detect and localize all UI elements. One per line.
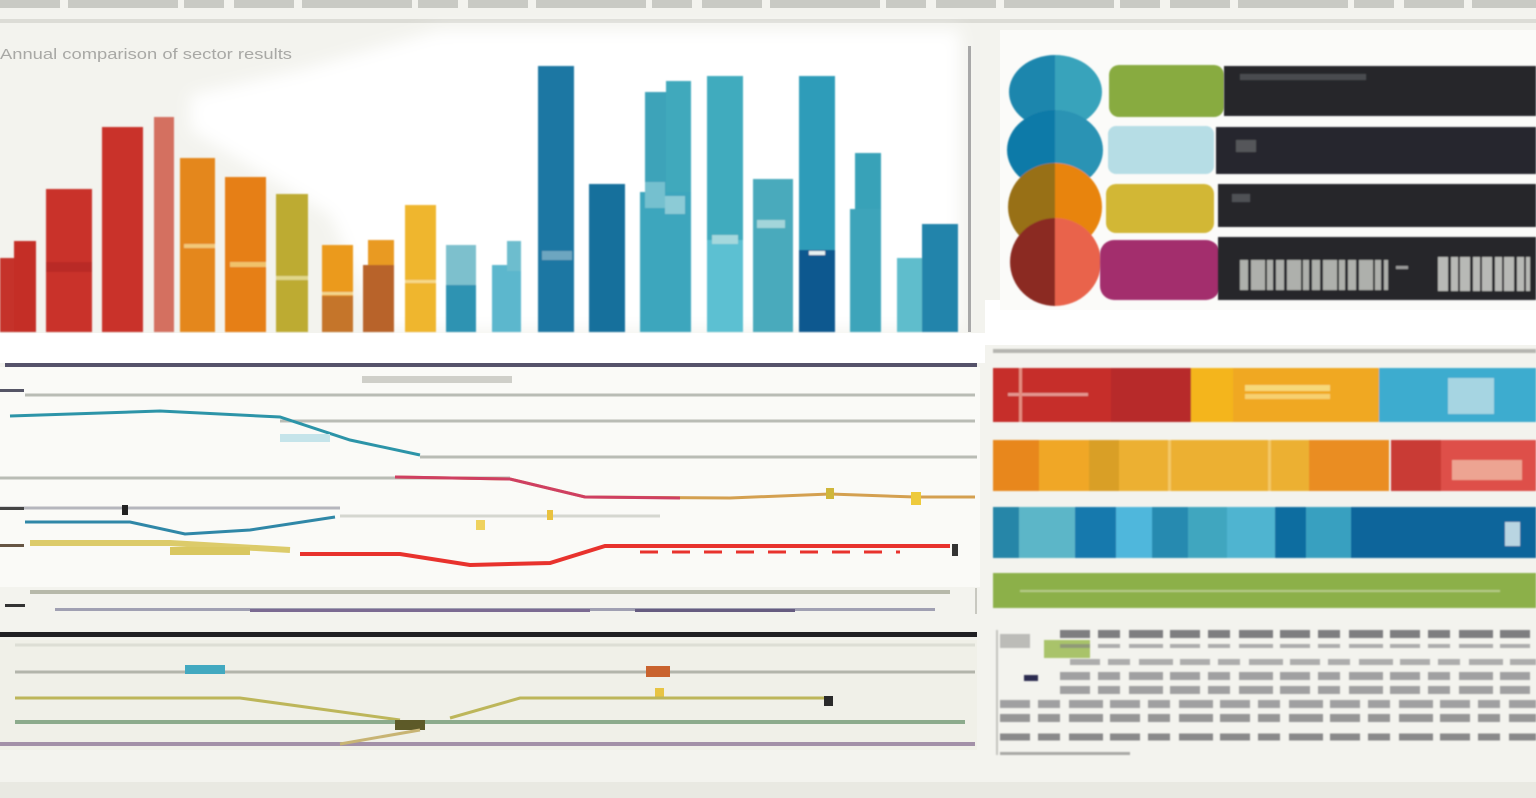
dark legend bars	[1216, 66, 1536, 300]
data table	[996, 630, 1536, 755]
stacked bar rows	[993, 349, 1536, 608]
bar chart	[0, 66, 958, 332]
row: red orange blue	[993, 368, 1536, 422]
lower line chart	[0, 640, 977, 750]
row: green band	[993, 573, 1536, 608]
timeline strip	[0, 588, 977, 637]
legend pills	[1100, 65, 1224, 300]
title: Annual comparison of sector results	[0, 46, 292, 63]
row: orange red	[993, 440, 1536, 491]
row: blue segments	[993, 507, 1536, 558]
icon: stacked circles	[1007, 55, 1103, 306]
line chart panel	[0, 363, 977, 565]
